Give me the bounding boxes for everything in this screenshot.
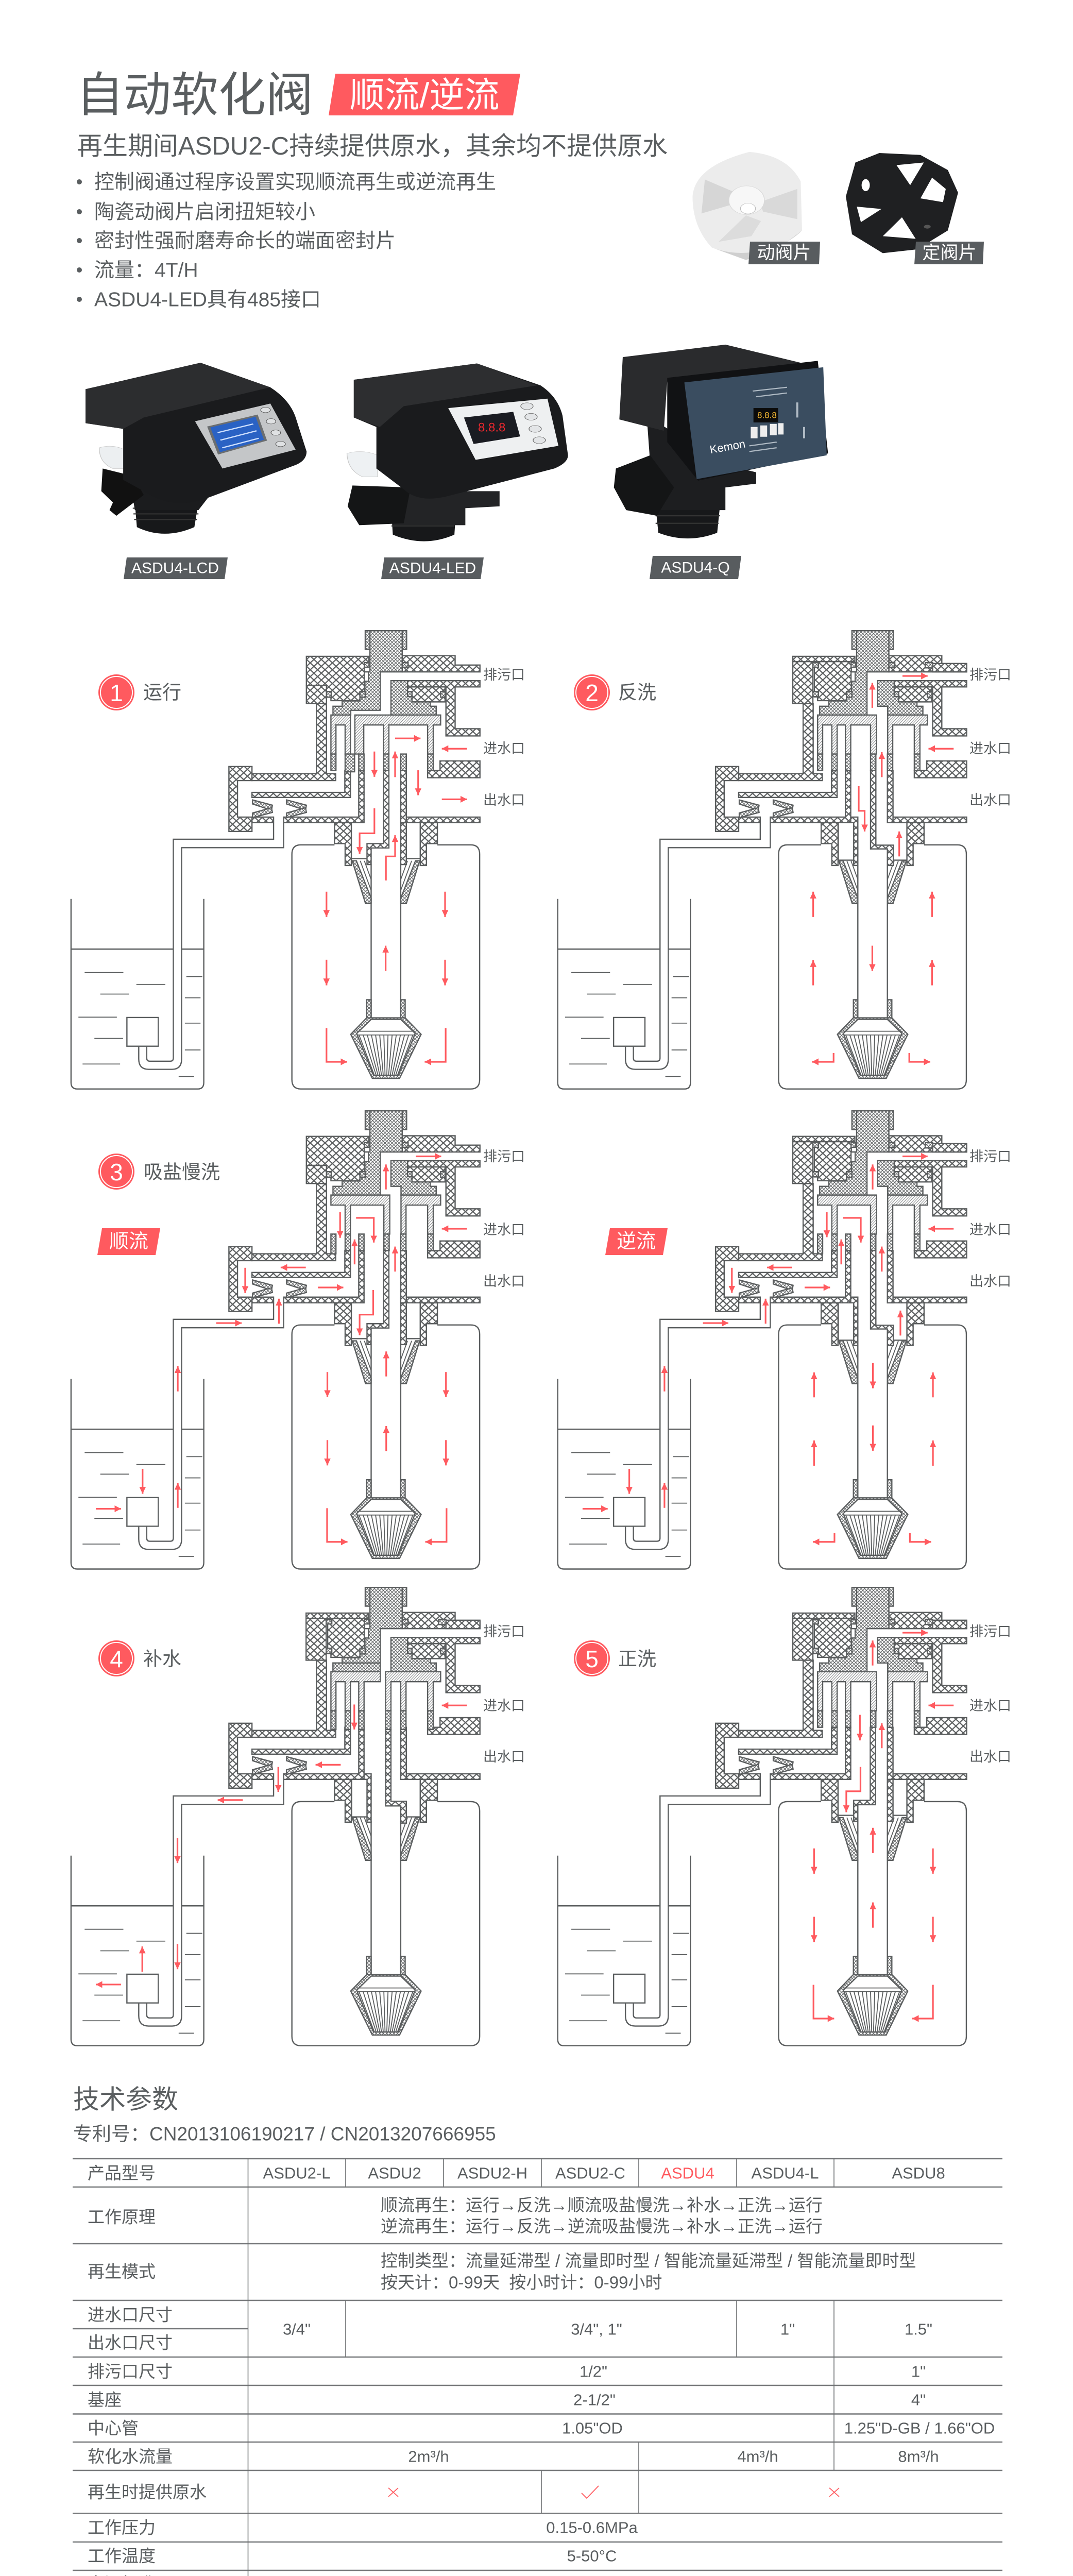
working principle and regeneration text: 按天计：0-99天 按小时计：0-99小时 bbox=[381, 2273, 662, 2292]
model header row: ASDU8 bbox=[892, 2164, 945, 2182]
model header row: ASDU2 bbox=[368, 2164, 421, 2182]
size values: 1.25"D-GB / 1.66"OD bbox=[844, 2419, 995, 2437]
port labels 4: 排污口 bbox=[483, 1624, 525, 1639]
feature bullet list: ASDU4-LED具有485接口 bbox=[94, 289, 321, 311]
port labels 2 bbox=[969, 667, 1011, 808]
spec table bbox=[73, 2159, 1002, 2576]
size values: 8m³/h bbox=[898, 2447, 939, 2466]
product: ASDU4-Q bbox=[614, 345, 828, 538]
step 1 heading: 运行: 1 bbox=[110, 680, 123, 706]
port labels 1: 出水口 bbox=[483, 792, 525, 808]
working principle and regeneration text: 控制类型：流量延滞型 / 流量即时型 / 智能流量延滞型 / 智能流量即时型 bbox=[381, 2251, 916, 2270]
icon: moving ceramic disc bbox=[692, 152, 802, 260]
diagram 1: service bbox=[71, 631, 480, 1089]
port labels 3: 进水口 bbox=[483, 1222, 525, 1238]
product: ASDU4-LCD bbox=[86, 363, 306, 534]
port labels 4 bbox=[483, 1624, 525, 1765]
step 5 heading: 正洗: 正洗 bbox=[618, 1649, 656, 1669]
port labels 5: 排污口 bbox=[969, 1624, 1011, 1639]
title: 自动软化阀 bbox=[76, 69, 313, 122]
port labels 3 right: 排污口 bbox=[969, 1149, 1011, 1164]
feature bullet list: 密封性强耐磨寿命长的端面密封片 bbox=[94, 230, 396, 252]
size values: 1.05"OD bbox=[562, 2419, 623, 2437]
step 5 heading: 正洗 bbox=[574, 1640, 656, 1676]
step 3 heading: 吸盐慢洗 bbox=[98, 1154, 220, 1190]
size values: 1.5" bbox=[905, 2320, 932, 2338]
icon: check bbox=[582, 2486, 599, 2498]
tag: upflow: 逆流 bbox=[617, 1231, 656, 1252]
diagram 4: brine refill bbox=[71, 1587, 480, 2046]
size values: 1/2" bbox=[580, 2363, 607, 2380]
table row labels: 再生时提供原水 bbox=[88, 2482, 207, 2502]
model header row: ASDU2-C bbox=[555, 2164, 625, 2182]
table row labels: 软化水流量 bbox=[88, 2447, 173, 2466]
step 1 heading: 运行 bbox=[98, 674, 181, 710]
port labels 2: 排污口 bbox=[969, 667, 1011, 683]
step 3 heading: 吸盐慢洗: 3 bbox=[110, 1159, 123, 1185]
port labels 2: 出水口 bbox=[969, 792, 1011, 808]
port labels 1 bbox=[483, 667, 525, 808]
label: moving disc: 动阀片 bbox=[757, 243, 811, 263]
step 1 heading: 运行: 运行 bbox=[143, 682, 181, 703]
port labels 3: 出水口 bbox=[483, 1274, 525, 1289]
size values: 0.15-0.6MPa bbox=[546, 2518, 638, 2537]
model label: ASDU4-LED bbox=[381, 557, 484, 579]
working principle and regeneration text: 顺流再生：运行→反洗→顺流吸盐慢洗→补水→正洗→运行 bbox=[381, 2196, 823, 2214]
size values: 3/4" bbox=[283, 2320, 311, 2338]
size values bbox=[283, 2320, 995, 2576]
port labels 5: 出水口 bbox=[969, 1749, 1011, 1765]
product: ASDU4-LED bbox=[347, 364, 568, 541]
product: ASDU4-Q: Kemon bbox=[709, 437, 746, 456]
icon: cross right bbox=[829, 2488, 839, 2497]
port labels 5: 进水口 bbox=[969, 1698, 1011, 1714]
size values: 3/4", 1" bbox=[571, 2320, 622, 2338]
tag: downflow bbox=[97, 1228, 160, 1255]
port labels 3: 排污口 bbox=[483, 1149, 525, 1164]
port labels 3 bbox=[483, 1149, 525, 1289]
size values: 2-1/2" bbox=[573, 2391, 616, 2409]
step 3 heading: 吸盐慢洗: 吸盐慢洗 bbox=[144, 1161, 220, 1183]
size values: 5-50°C bbox=[567, 2547, 617, 2565]
feature bullet list: 控制阀通过程序设置实现顺流再生或逆流再生 bbox=[94, 171, 496, 194]
label: fixed disc: 定阀片 bbox=[922, 243, 977, 263]
section heading: technical parameters: 技术参数 bbox=[73, 2084, 178, 2114]
working principle and regeneration text: 逆流再生：运行→反洗→逆流吸盐慢洗→补水→正洗→运行 bbox=[381, 2216, 823, 2236]
diagram 3: downflow brine bbox=[71, 1111, 480, 1569]
table row labels: 工作原理 bbox=[88, 2207, 156, 2227]
port labels 3 right: 进水口 bbox=[969, 1222, 1011, 1238]
label: fixed disc bbox=[914, 242, 984, 264]
step 5 heading: 正洗: 5 bbox=[585, 1646, 599, 1672]
table row labels bbox=[88, 2164, 207, 2576]
port labels 4: 进水口 bbox=[483, 1698, 525, 1714]
table row labels: 基座 bbox=[88, 2391, 122, 2409]
model header row: ASDU2-H bbox=[457, 2164, 527, 2182]
port labels 1: 排污口 bbox=[483, 667, 525, 683]
tag: flow direction: 顺流/逆流 bbox=[350, 76, 499, 115]
step 2 heading: 反洗: 反洗 bbox=[618, 682, 656, 703]
step 4 heading: 补水 bbox=[98, 1640, 181, 1676]
model label: ASDU4-LCD: ASDU4-LCD bbox=[131, 560, 219, 577]
feature bullet list: 陶瓷动阀片启闭扭矩较小 bbox=[94, 201, 315, 224]
model header row bbox=[263, 2164, 945, 2182]
port labels 4: 出水口 bbox=[483, 1749, 525, 1765]
step 4 heading: 补水: 补水 bbox=[143, 1649, 181, 1669]
step 4 heading: 补水: 4 bbox=[110, 1646, 123, 1672]
icon: cross bbox=[388, 2488, 398, 2497]
diagram 2: backwash bbox=[558, 631, 967, 1089]
port labels 5 bbox=[969, 1624, 1011, 1765]
diagram 5: rinse bbox=[558, 1587, 967, 2046]
product: ASDU4-Q: 8.8.8 bbox=[757, 410, 777, 420]
table row labels: 再生模式 bbox=[88, 2262, 156, 2281]
size values: 1" bbox=[911, 2363, 926, 2380]
product: ASDU4-LED: 8.8.8 bbox=[478, 420, 505, 435]
table row labels: 工作温度 bbox=[88, 2546, 156, 2566]
size values: 1" bbox=[780, 2320, 795, 2338]
port labels 3 right: 出水口 bbox=[969, 1274, 1011, 1289]
tag: upflow bbox=[605, 1228, 668, 1255]
table row labels: 进水口尺寸 bbox=[88, 2305, 173, 2325]
feature bullet list: 流量：4T/H bbox=[94, 260, 198, 281]
diagram 3 right: upflow brine bbox=[558, 1111, 967, 1569]
table row labels: 产品型号 bbox=[88, 2164, 156, 2182]
table row labels: 排污口尺寸 bbox=[88, 2362, 173, 2381]
model label: ASDU4-LCD bbox=[124, 557, 228, 579]
size values: 4" bbox=[911, 2391, 926, 2409]
model label: ASDU4-LED: ASDU4-LED bbox=[389, 560, 476, 577]
model label: ASDU4-Q bbox=[650, 556, 741, 579]
icon: fixed rubber disc bbox=[846, 153, 958, 253]
model header row: ASDU2-L bbox=[263, 2164, 330, 2182]
model header row: ASDU4 bbox=[661, 2164, 714, 2182]
tag: downflow: 顺流 bbox=[109, 1231, 148, 1252]
patent numbers: 专利号：CN2013106190217 / CN2013207666955 bbox=[73, 2124, 496, 2144]
step 2 heading: 反洗: 2 bbox=[585, 680, 599, 706]
table row labels: 中心管 bbox=[88, 2418, 139, 2438]
table row labels: 出水口尺寸 bbox=[88, 2333, 173, 2352]
model header row: ASDU4-L bbox=[752, 2164, 819, 2182]
model label: ASDU4-Q: ASDU4-Q bbox=[661, 560, 730, 576]
feature bullet list bbox=[77, 171, 496, 311]
label: moving disc bbox=[748, 242, 820, 264]
table row labels: 工作压力 bbox=[88, 2518, 156, 2537]
port labels 1: 进水口 bbox=[483, 741, 525, 756]
subtitle: 再生期间ASDU2-C持续提供原水，其余均不提供原水 bbox=[77, 132, 668, 160]
working principle and regeneration text bbox=[381, 2196, 916, 2292]
port labels 2: 进水口 bbox=[969, 741, 1011, 756]
step 2 heading: 反洗 bbox=[574, 674, 656, 710]
size values: 4m³/h bbox=[737, 2447, 778, 2466]
size values: 2m³/h bbox=[408, 2447, 449, 2466]
port labels 3 right bbox=[969, 1149, 1011, 1289]
